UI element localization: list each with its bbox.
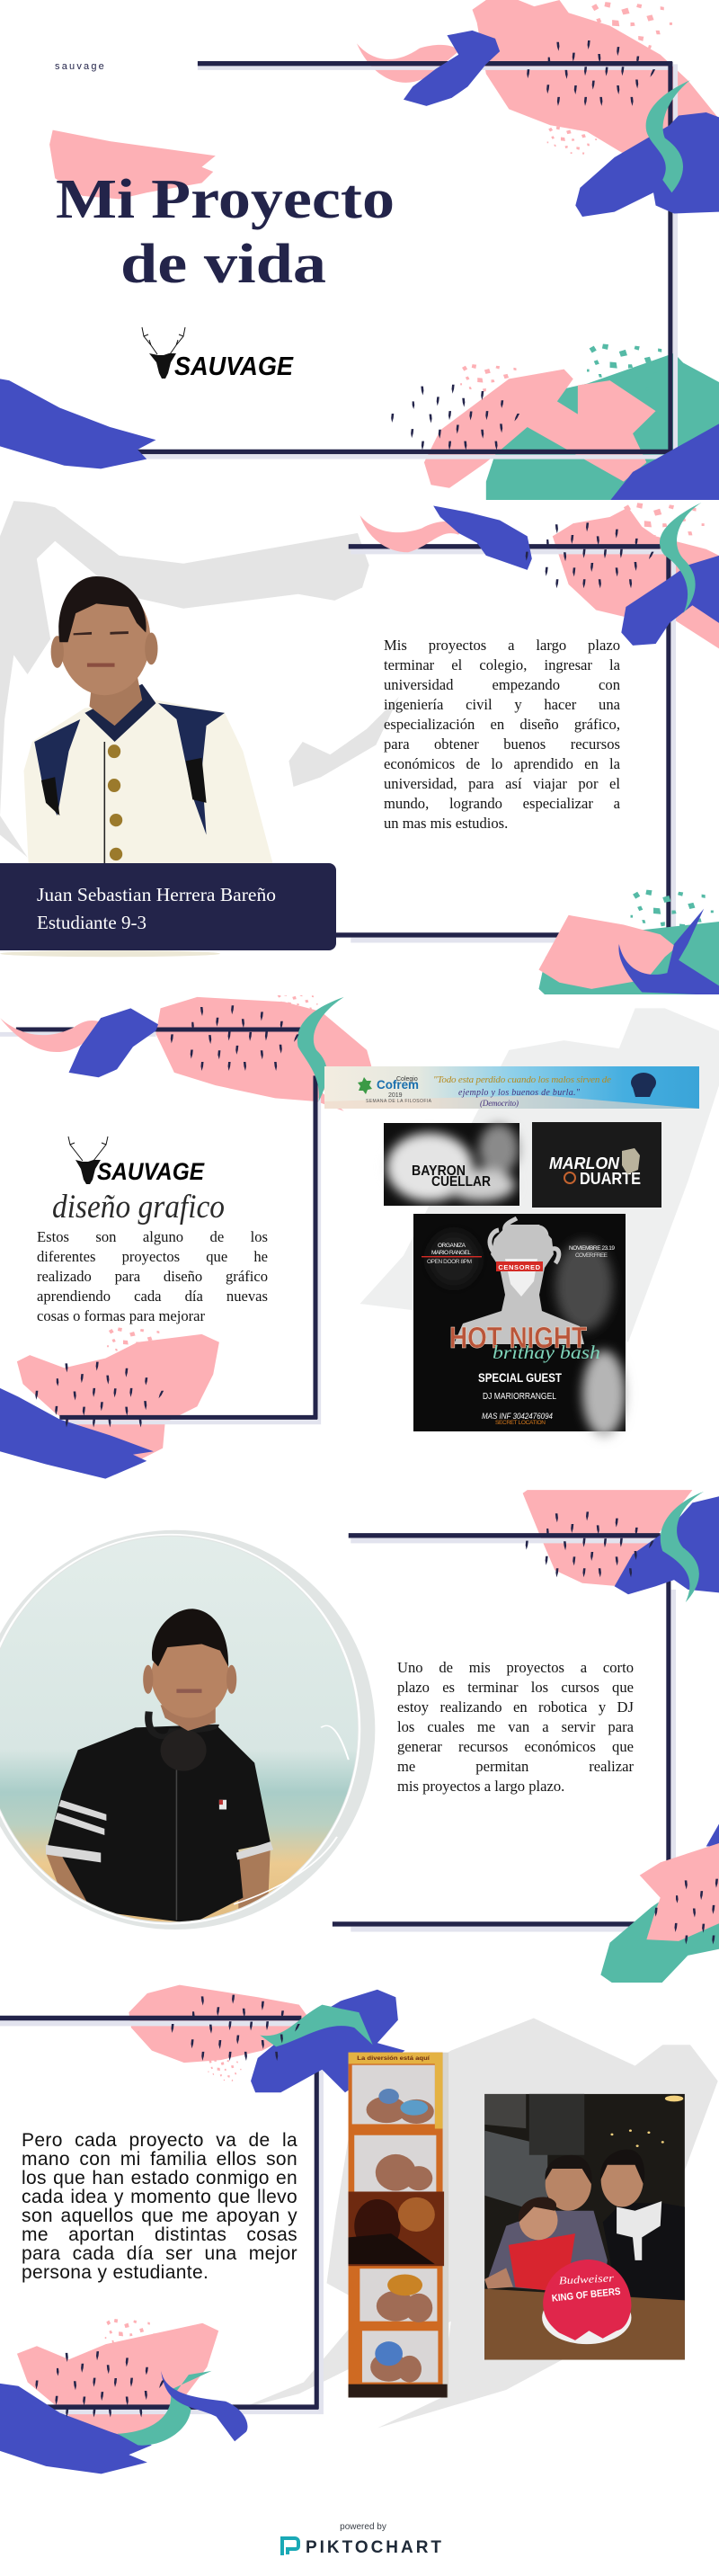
splatter: teal xyxy=(587,343,661,378)
brush: bottom right xyxy=(538,909,719,995)
brush: teal ribbon xyxy=(260,2005,373,2046)
brush: pink behind title xyxy=(49,130,216,199)
frame: section 4 xyxy=(333,1536,676,1932)
text block: family: los que han estado conmigo en xyxy=(22,2168,297,2188)
poster: Hot Night: DJ MARIORRANGEL xyxy=(483,1392,556,1402)
poster: Hot Night: MARIO RANGEL xyxy=(431,1250,471,1256)
text block: short-term projects: estoy realizando en robotica y DJ xyxy=(397,1698,634,1716)
poster: Hot Night: brithay bash xyxy=(493,1341,600,1363)
section 4: short-term projects xyxy=(0,1490,719,1984)
footer: Piktochart xyxy=(282,2522,441,2557)
title: Mi Proyecto xyxy=(56,169,395,230)
splatter: pink top xyxy=(624,503,705,536)
text: cake xyxy=(551,2271,621,2304)
text block: graphic design: realizado para diseño gráfico xyxy=(37,1268,268,1285)
text block: short-term projects: me permitan realizar xyxy=(397,1758,634,1775)
image: Marlon Duarte xyxy=(532,1122,661,1208)
brush: lower right xyxy=(600,1824,719,1984)
brush: pink top xyxy=(155,997,371,1111)
text block: long-term projects: un mas mis estudios. xyxy=(384,815,508,832)
marks: lower xyxy=(655,1879,719,1944)
marks: lower xyxy=(35,2351,164,2417)
text block: family: para cada día ser una mejor xyxy=(22,2243,297,2264)
brush: blue left xyxy=(0,379,155,468)
splatter: pink lower xyxy=(105,2319,155,2352)
section 5: family xyxy=(0,1985,718,2473)
brush: pink squiggle xyxy=(0,1018,105,1052)
text block: family: son aquellos que me apoyan y xyxy=(22,2206,297,2226)
text block: long-term projects: terminar el colegio, ingresar la xyxy=(384,656,620,673)
brush: pink top xyxy=(473,0,719,167)
poster: Hot Night: MAS INF 3042476094 xyxy=(482,1412,553,1421)
name box: Estudiante 9-3 xyxy=(37,912,146,933)
brush: grey background xyxy=(239,2019,718,2428)
poster: Hot Night: CENSORED xyxy=(498,1263,541,1271)
image: Bayron Cuellar: CUELLAR xyxy=(431,1174,491,1190)
photo: photobooth strip: La diversión está aquí xyxy=(357,2056,431,2062)
poster: Hot Night xyxy=(413,1214,626,1437)
section 2: long-term projects xyxy=(0,501,719,995)
text: cake: KING OF BEERS xyxy=(551,2286,621,2304)
splatter: pink top xyxy=(590,2,672,49)
brush: pink top xyxy=(553,507,719,648)
name box xyxy=(0,863,336,950)
text block: graphic design: diferentes proyectos que he xyxy=(37,1248,268,1265)
poster: Hot Night: NOVIEMBRE 23.19 xyxy=(569,1245,615,1252)
text block: short-term projects: generar recursos económicos que xyxy=(397,1738,634,1755)
poster: Hot Night: SECRET LOCATION xyxy=(495,1420,546,1426)
brush: blue lower xyxy=(0,1388,154,1479)
text block: family: mano con mi familia ellos son xyxy=(22,2149,297,2170)
title xyxy=(57,178,392,282)
logo: sauvage: SAUVAGE xyxy=(174,352,295,381)
marks: top xyxy=(171,1005,299,1071)
tagline: sauvage xyxy=(55,61,106,72)
frame: section 2 xyxy=(336,544,676,943)
text: cake: Budweiser xyxy=(558,2271,614,2286)
splatter: pink lower xyxy=(107,1327,165,1360)
brush: teal ribbon xyxy=(660,503,702,613)
brush: teal lower xyxy=(118,2371,212,2446)
brush: blue stroke xyxy=(433,505,532,570)
brush: blue lower xyxy=(0,2384,152,2473)
section 1: cover xyxy=(0,0,719,501)
brush: blue bottom right xyxy=(610,423,719,501)
logo: sauvage: SAUVAGE xyxy=(97,1158,205,1185)
banner image: 2019 xyxy=(388,1092,403,1099)
photo: circular portrait xyxy=(0,1530,380,1930)
brush: blue right xyxy=(621,556,719,646)
brush: pink top xyxy=(129,1985,313,2063)
text block: short-term projects xyxy=(397,1659,634,1795)
poster: Hot Night: SPECIAL GUEST xyxy=(478,1370,562,1385)
text block: long-term projects: mundo, logrando especializar a xyxy=(384,795,620,812)
brush: pink bottom xyxy=(424,370,656,488)
brush: blue top xyxy=(251,1990,405,2092)
text block: long-term projects: especialización en diseño gráfico, xyxy=(384,716,620,733)
brush: pink lower xyxy=(17,2323,218,2451)
text block: graphic design: cosas o formas para mejorar xyxy=(37,1307,205,1324)
text block: long-term projects: Mis proyectos a largo plazo xyxy=(384,637,620,654)
banner image xyxy=(324,1066,699,1109)
text block: long-term projects xyxy=(384,637,620,832)
banner image: ejemplo y los buenos de burla." xyxy=(458,1088,581,1098)
text block: short-term projects: mis proyectos a largo plazo. xyxy=(397,1778,564,1795)
image: Marlon Duarte: DUARTE xyxy=(580,1170,641,1188)
brush: pink lower xyxy=(17,1334,219,1461)
marks: lower xyxy=(35,1362,164,1427)
text block: family: persona y estudiante. xyxy=(22,2262,209,2283)
image: Bayron Cuellar: BAYRON xyxy=(412,1163,466,1179)
text block: long-term projects: para obtener buenos recursos xyxy=(384,735,620,753)
text block: family: Pero cada proyecto va de la xyxy=(22,2130,297,2151)
splatter: pink top xyxy=(208,2059,241,2081)
brush: grey background xyxy=(360,1008,719,1342)
text block: long-term projects: ingeniería civil y hacer una xyxy=(384,696,620,713)
title: de vida xyxy=(120,234,326,295)
text block: graphic design xyxy=(37,1228,268,1324)
brush: pink squiggle xyxy=(360,515,463,552)
marks: bottom xyxy=(391,385,519,450)
marks: top xyxy=(171,1995,300,2061)
logo: sauvage xyxy=(142,327,295,381)
brush: grey background xyxy=(0,501,369,858)
brush: teal ribbon xyxy=(297,997,344,1101)
text block: long-term projects: económicos de lo aprendido en la xyxy=(384,755,620,772)
photo: student in uniform xyxy=(0,576,273,957)
frame: section 3 xyxy=(0,1030,321,1424)
brush: blue stroke xyxy=(69,1008,158,1077)
frame: section 5 xyxy=(0,2019,324,2414)
text block: family: cada idea y momento que llevo xyxy=(22,2187,297,2207)
brush: blue top stroke xyxy=(404,31,500,106)
footer: Piktochart: powered by xyxy=(340,2522,386,2532)
logo: sauvage xyxy=(68,1136,205,1185)
splatter: pink top xyxy=(277,995,318,1009)
poster: Hot Night: ORGANIZA xyxy=(438,1243,466,1249)
splatter: teal lower xyxy=(631,890,714,926)
name box: Juan Sebastian Herrera Bareño xyxy=(37,884,276,905)
brush: pink squiggle xyxy=(357,43,458,83)
text block: graphic design: aprendiendo cada día nuevas xyxy=(37,1288,268,1305)
image: Marlon Duarte: MARLON xyxy=(549,1154,620,1172)
banner image: Cofrem xyxy=(377,1077,419,1092)
text block: short-term projects: plazo es terminar los cursos que xyxy=(397,1679,634,1696)
poster: Hot Night: COVER:FREE xyxy=(575,1252,608,1259)
poster: Hot Night: OPEN DOOR 8PM xyxy=(427,1259,472,1265)
splatter: pink lower xyxy=(547,127,597,155)
banner image: (Democrito) xyxy=(480,1099,519,1108)
banner image: "Todo esta perdido cuando los malos sirven de xyxy=(433,1074,611,1085)
brush: teal ribbon xyxy=(646,80,690,192)
marks: top xyxy=(527,40,655,106)
banner image: SEMANA DE LA FILOSOFIA xyxy=(366,1099,432,1104)
section 3: graphic design xyxy=(0,994,719,1479)
marks xyxy=(526,1511,654,1577)
frame: section 1 xyxy=(138,62,678,459)
brush: blue right xyxy=(615,1496,719,1594)
text block: long-term projects: universidad empezando con xyxy=(384,676,620,693)
brush: teal bottom xyxy=(486,353,719,501)
poster: Hot Night: HOT NIGHT xyxy=(449,1321,587,1354)
brush: pink top xyxy=(523,1490,692,1586)
splatter: pink bottom xyxy=(460,364,516,392)
photo: family with cake xyxy=(484,2094,685,2360)
brush: blue right xyxy=(575,112,719,217)
text block: short-term projects: los cuales me van a servir para xyxy=(397,1718,634,1735)
footer: Piktochart: PIKTOCHART xyxy=(306,2538,441,2557)
banner image: Colegio xyxy=(396,1076,418,1083)
text block: family: me aportan distintas cosas xyxy=(22,2224,297,2245)
text block: family xyxy=(22,2130,297,2283)
marks xyxy=(526,522,654,588)
script heading: diseño grafico xyxy=(52,1189,225,1226)
text block: long-term projects: universidad, para así viajar por el xyxy=(384,775,620,792)
text block: short-term projects: Uno de mis proyectos a corto xyxy=(397,1659,634,1676)
brush: blue stroke xyxy=(161,2371,247,2441)
photo: photobooth strip xyxy=(349,2053,448,2398)
text block: graphic design: Estos son alguno de los xyxy=(37,1228,268,1245)
image: Bayron Cuellar xyxy=(384,1123,519,1206)
brush: small grey xyxy=(288,697,399,787)
brush: teal ribbon xyxy=(661,1492,704,1602)
